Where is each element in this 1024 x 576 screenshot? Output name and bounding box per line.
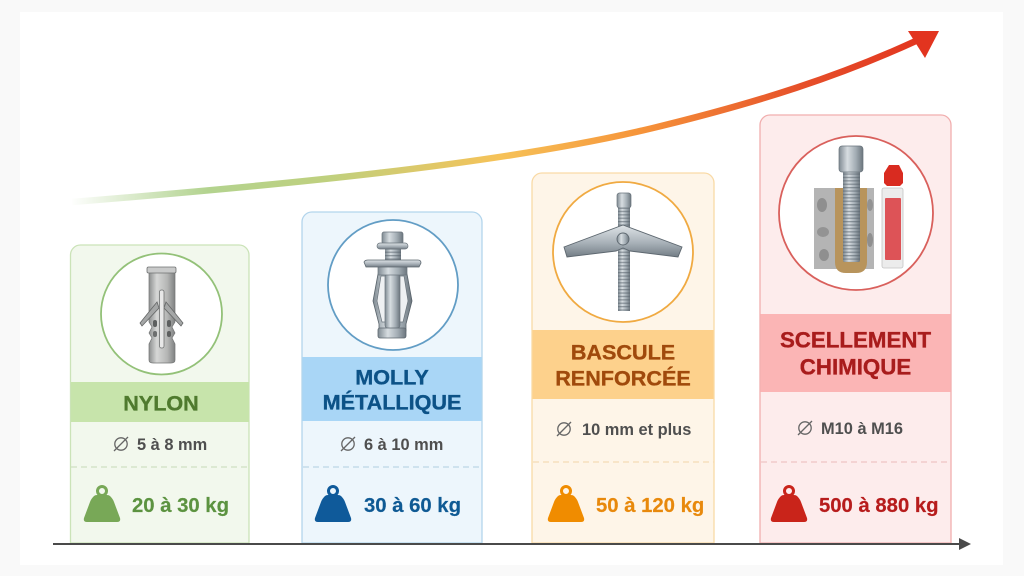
spec: scellement diameter: M10 à M16	[821, 420, 903, 438]
panel: bascule	[532, 173, 714, 543]
trend arrow	[72, 31, 939, 202]
panel: molly	[302, 212, 482, 543]
heading: scellement: CHIMIQUE	[800, 354, 911, 380]
load: scellement	[771, 486, 939, 522]
spec: nylon diameter: 5 à 8 mm	[137, 436, 207, 454]
icon circle: toggle bolt	[553, 182, 693, 322]
heading: bascule: BASCULE	[571, 340, 675, 364]
band: bascule	[532, 330, 714, 399]
load: nylon	[84, 486, 229, 522]
heading: scellement: SCELLEMENT	[780, 328, 931, 352]
load: scellement: 500 à 880 kg	[819, 495, 939, 517]
load: molly	[315, 486, 461, 522]
spec: bascule diameter: 10 mm et plus	[582, 421, 691, 439]
load: bascule	[548, 486, 704, 522]
band: scellement	[760, 314, 950, 392]
load: nylon: 20 à 30 kg	[132, 495, 229, 517]
axis arrow	[53, 538, 971, 550]
load: molly: 30 à 60 kg	[364, 495, 461, 517]
band: molly	[302, 357, 482, 421]
panel: scellement	[760, 115, 951, 543]
heading: nylon: NYLON	[123, 390, 199, 416]
heading: molly: MOLLY	[355, 364, 429, 390]
band: nylon	[71, 382, 249, 422]
heading: molly: MÉTALLIQUE	[323, 390, 461, 414]
load: bascule: 50 à 120 kg	[596, 495, 704, 517]
heading: bascule: RENFORCÉE	[555, 366, 691, 390]
spec: molly diameter: 6 à 10 mm	[364, 436, 443, 454]
panel: nylon	[70, 245, 249, 543]
icon circle: nylon anchor	[101, 254, 222, 374]
icon circle: chemical anchor	[779, 136, 933, 290]
icon circle: molly anchor	[328, 220, 458, 350]
